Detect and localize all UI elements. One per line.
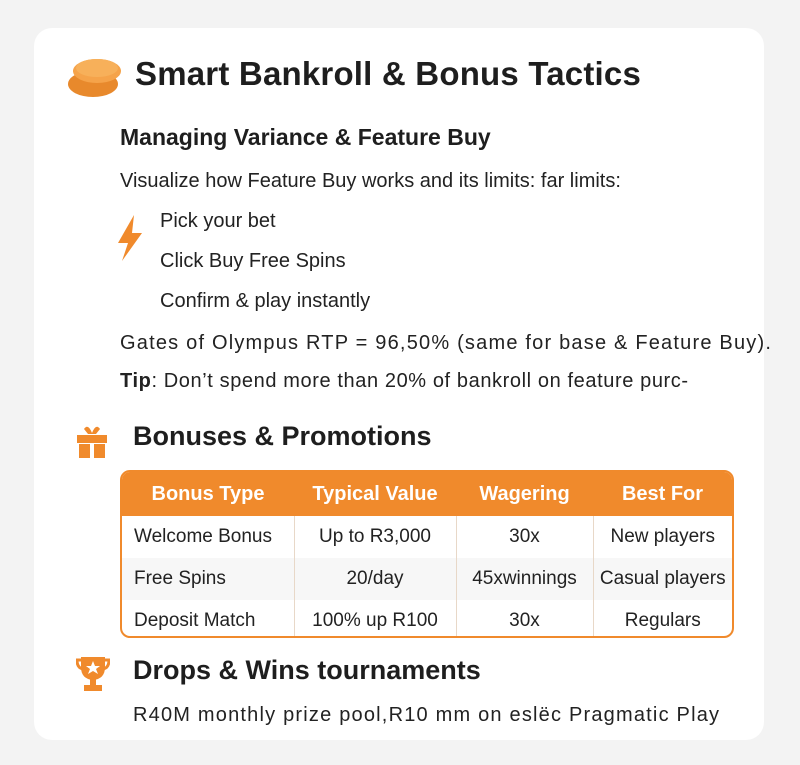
icon: coins bbox=[68, 59, 121, 97]
steps list: Pick your bet bbox=[160, 210, 276, 232]
steps list: Confirm & play instantly bbox=[160, 290, 370, 312]
bonus table: 45xwinnings bbox=[472, 568, 577, 589]
bonus table: 30x bbox=[509, 610, 540, 631]
bonus table: 30x bbox=[509, 526, 540, 547]
bonus table: Welcome Bonus bbox=[134, 526, 272, 547]
bonus table: Bonus Type bbox=[152, 482, 264, 504]
bonus table: Casual players bbox=[600, 568, 726, 589]
bonus table: Free Spins bbox=[134, 568, 226, 589]
bonus table: Typical Value bbox=[312, 482, 438, 504]
bonus table: 20/day bbox=[346, 568, 404, 589]
intro text: Visualize how Feature Buy works and its limits: far limits: bbox=[120, 170, 621, 192]
heading: variance: Managing Variance & Feature Buy bbox=[120, 124, 491, 150]
steps list bbox=[160, 210, 370, 312]
icon: gift bbox=[77, 426, 107, 458]
steps list: Click Buy Free Spins bbox=[160, 250, 346, 272]
icon: lightning bbox=[118, 215, 142, 261]
bonus table: New players bbox=[610, 526, 715, 547]
bonus table: Best For bbox=[622, 482, 703, 504]
bonus table bbox=[120, 470, 734, 638]
RTP text: Gates of Olympus RTP = 96,50% (same for base & Feature Buy). bbox=[120, 332, 772, 354]
heading: drops & wins: Drops & Wins tournaments bbox=[133, 655, 481, 685]
bonus table: 100% up R100 bbox=[312, 610, 438, 631]
bonus table: Wagering bbox=[479, 482, 570, 504]
icon: trophy bbox=[76, 657, 110, 691]
drops text: R40M monthly prize pool,R10 mm on eslëc Pragmatic Play bbox=[133, 704, 720, 726]
title: Smart Bankroll & Bonus Tactics bbox=[135, 55, 641, 92]
bonus table: Regulars bbox=[625, 610, 701, 631]
heading: bonuses: Bonuses & Promotions bbox=[133, 421, 432, 451]
tip: Tip: Don’t spend more than 20% of bankroll on feature purc- bbox=[120, 370, 689, 392]
bonus table: Deposit Match bbox=[134, 610, 255, 631]
bonus table: Up to R3,000 bbox=[319, 526, 431, 547]
